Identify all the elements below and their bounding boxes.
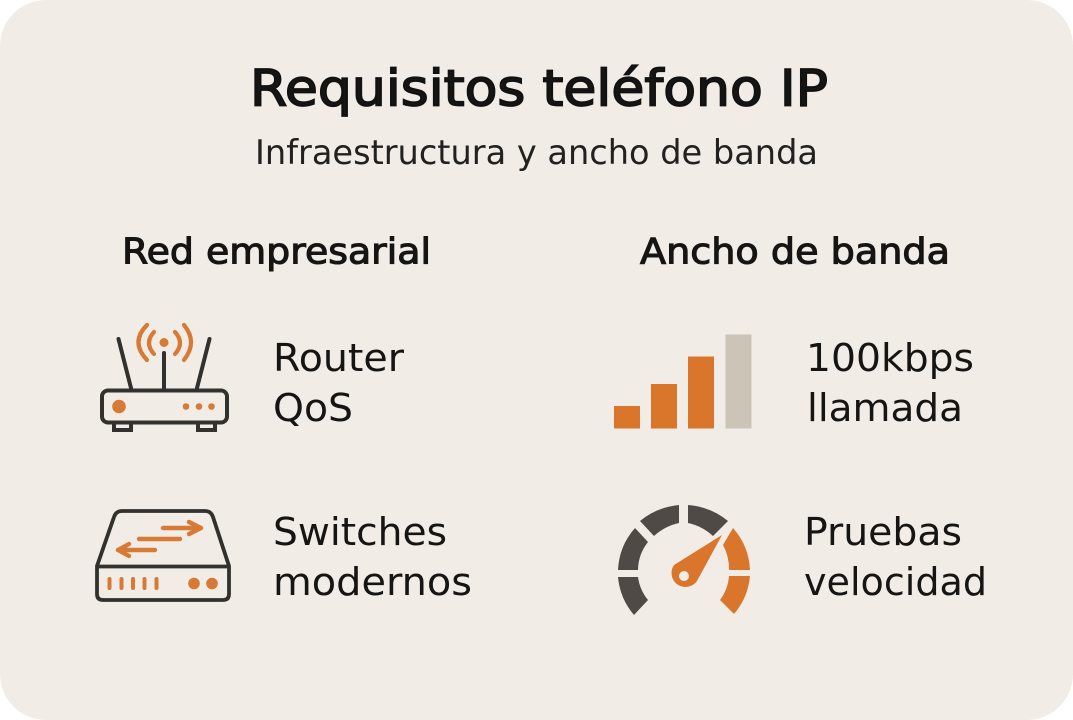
text: Router QoS: QoS xyxy=(273,386,353,430)
subtitle: Infraestructura y ancho de banda xyxy=(255,133,818,173)
text: Switches modernos xyxy=(273,510,472,604)
text: Router QoS: Router xyxy=(273,336,404,380)
text: Pruebas velocidad: velocidad xyxy=(804,560,987,604)
heading: Ancho de banda: Ancho de banda xyxy=(640,232,950,272)
text: 100kbps llamada: 100kbps xyxy=(806,336,974,380)
text: 100kbps llamada xyxy=(806,336,974,430)
icon: network switch xyxy=(97,511,229,600)
heading: Red empresarial: Red empresarial xyxy=(122,232,431,272)
text: Switches modernos: Switches xyxy=(273,510,447,554)
icon: signal bars xyxy=(614,334,752,428)
text: Pruebas velocidad xyxy=(804,510,987,604)
icon: speed gauge xyxy=(618,505,750,615)
text: Router QoS xyxy=(273,336,404,430)
title: Requisitos teléfono IP xyxy=(250,60,828,118)
text: 100kbps llamada: llamada xyxy=(807,386,963,430)
icon: router xyxy=(102,325,227,430)
text: Pruebas velocidad: Pruebas xyxy=(804,510,962,554)
text: Switches modernos: modernos xyxy=(273,560,472,604)
